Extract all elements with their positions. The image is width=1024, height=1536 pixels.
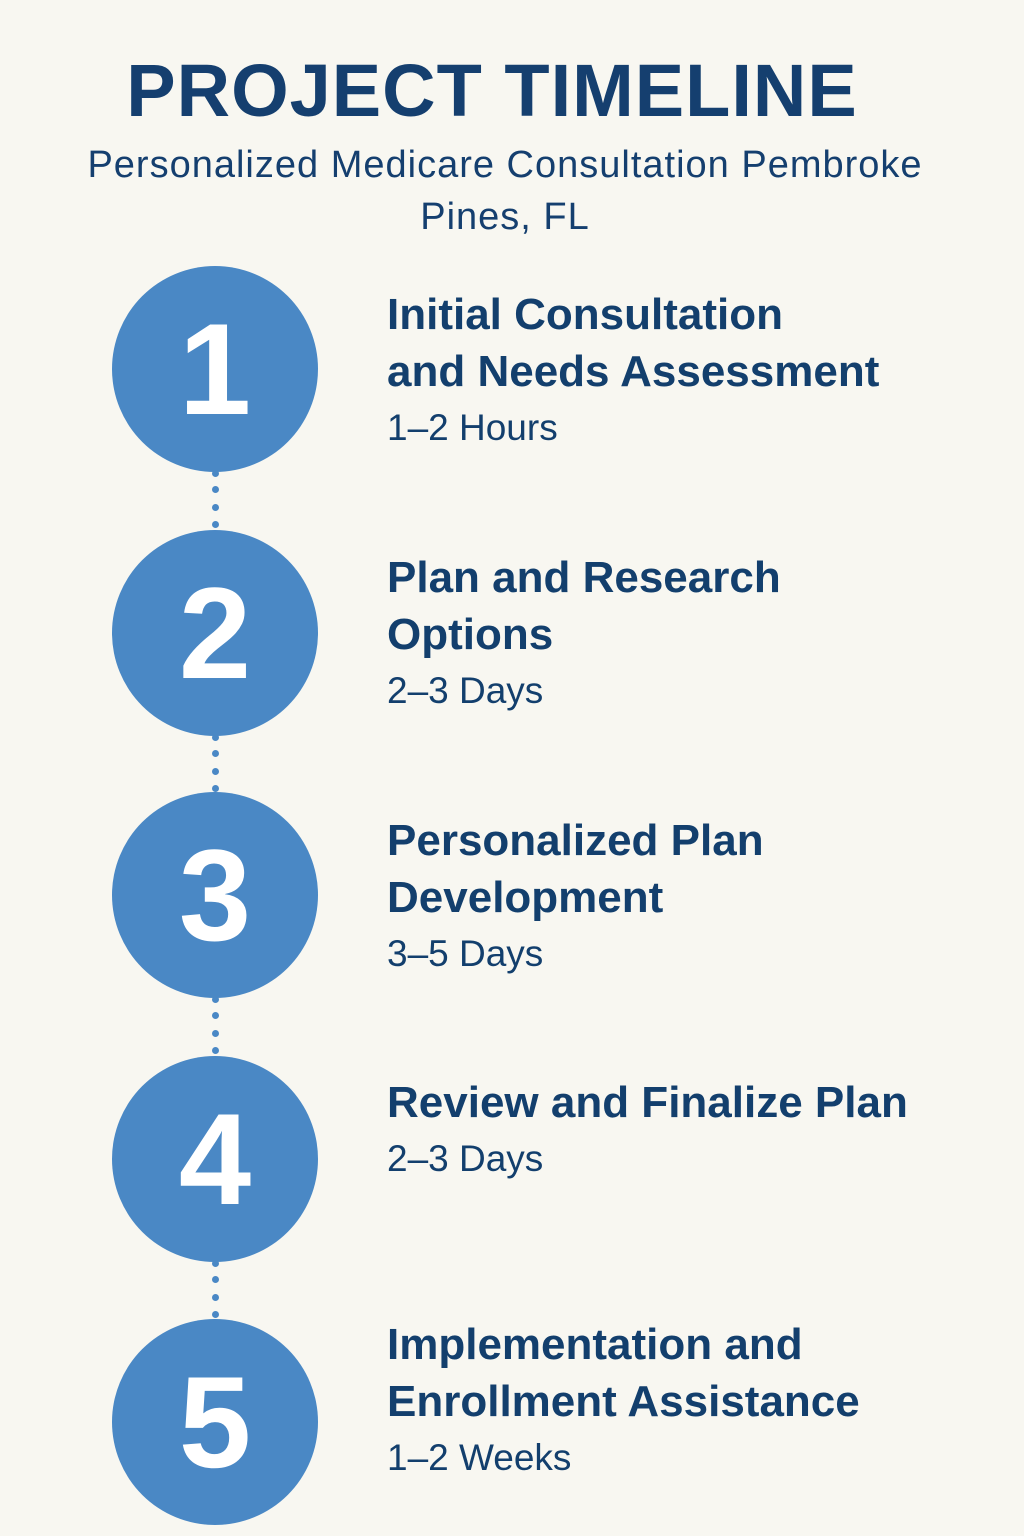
step 1 text: Initial Consultation xyxy=(387,290,783,339)
step 4 text xyxy=(387,1078,908,1179)
circle 3: 3 xyxy=(179,822,251,968)
circle 2 xyxy=(112,530,318,736)
circle 4: 4 xyxy=(179,1086,251,1232)
step 2 text: 2–3 Days xyxy=(387,670,543,711)
step 5 text: Enrollment Assistance xyxy=(387,1377,860,1426)
connector dots 4-5 xyxy=(212,1262,219,1318)
step 1 text: 1–2 Hours xyxy=(387,407,558,448)
circle 4 xyxy=(112,1056,318,1262)
step 2 text xyxy=(387,553,781,711)
step 2 text: Options xyxy=(387,610,553,659)
subtitle: Pines, FL xyxy=(420,196,590,238)
circle 1 xyxy=(112,266,318,472)
step 5 text: Implementation and xyxy=(387,1320,803,1369)
circle 5: 5 xyxy=(179,1349,251,1495)
step 2 text: Plan and Research xyxy=(387,553,781,602)
circle 5 xyxy=(112,1319,318,1525)
step 5 text: 1–2 Weeks xyxy=(387,1437,571,1478)
subtitle xyxy=(87,144,923,238)
connector dots 3-4 xyxy=(212,998,219,1054)
connector dots 1-2 xyxy=(212,472,219,528)
step 4 text: 2–3 Days xyxy=(387,1138,543,1179)
step 3 text: Development xyxy=(387,873,663,922)
step 1 text: and Needs Assessment xyxy=(387,347,879,396)
circle 2: 2 xyxy=(179,560,251,706)
step 4 text: Review and Finalize Plan xyxy=(387,1078,908,1127)
subtitle: Personalized Medicare Consultation Pembroke xyxy=(87,144,923,186)
title: PROJECT TIMELINE xyxy=(126,49,858,132)
step 3 text: 3–5 Days xyxy=(387,933,543,974)
step 1 text xyxy=(387,290,879,448)
circle 3 xyxy=(112,792,318,998)
step 3 text xyxy=(387,816,764,974)
step 5 text xyxy=(387,1320,860,1478)
step 3 text: Personalized Plan xyxy=(387,816,764,865)
circle 1: 1 xyxy=(179,296,251,442)
connector dots 2-3 xyxy=(212,736,219,792)
